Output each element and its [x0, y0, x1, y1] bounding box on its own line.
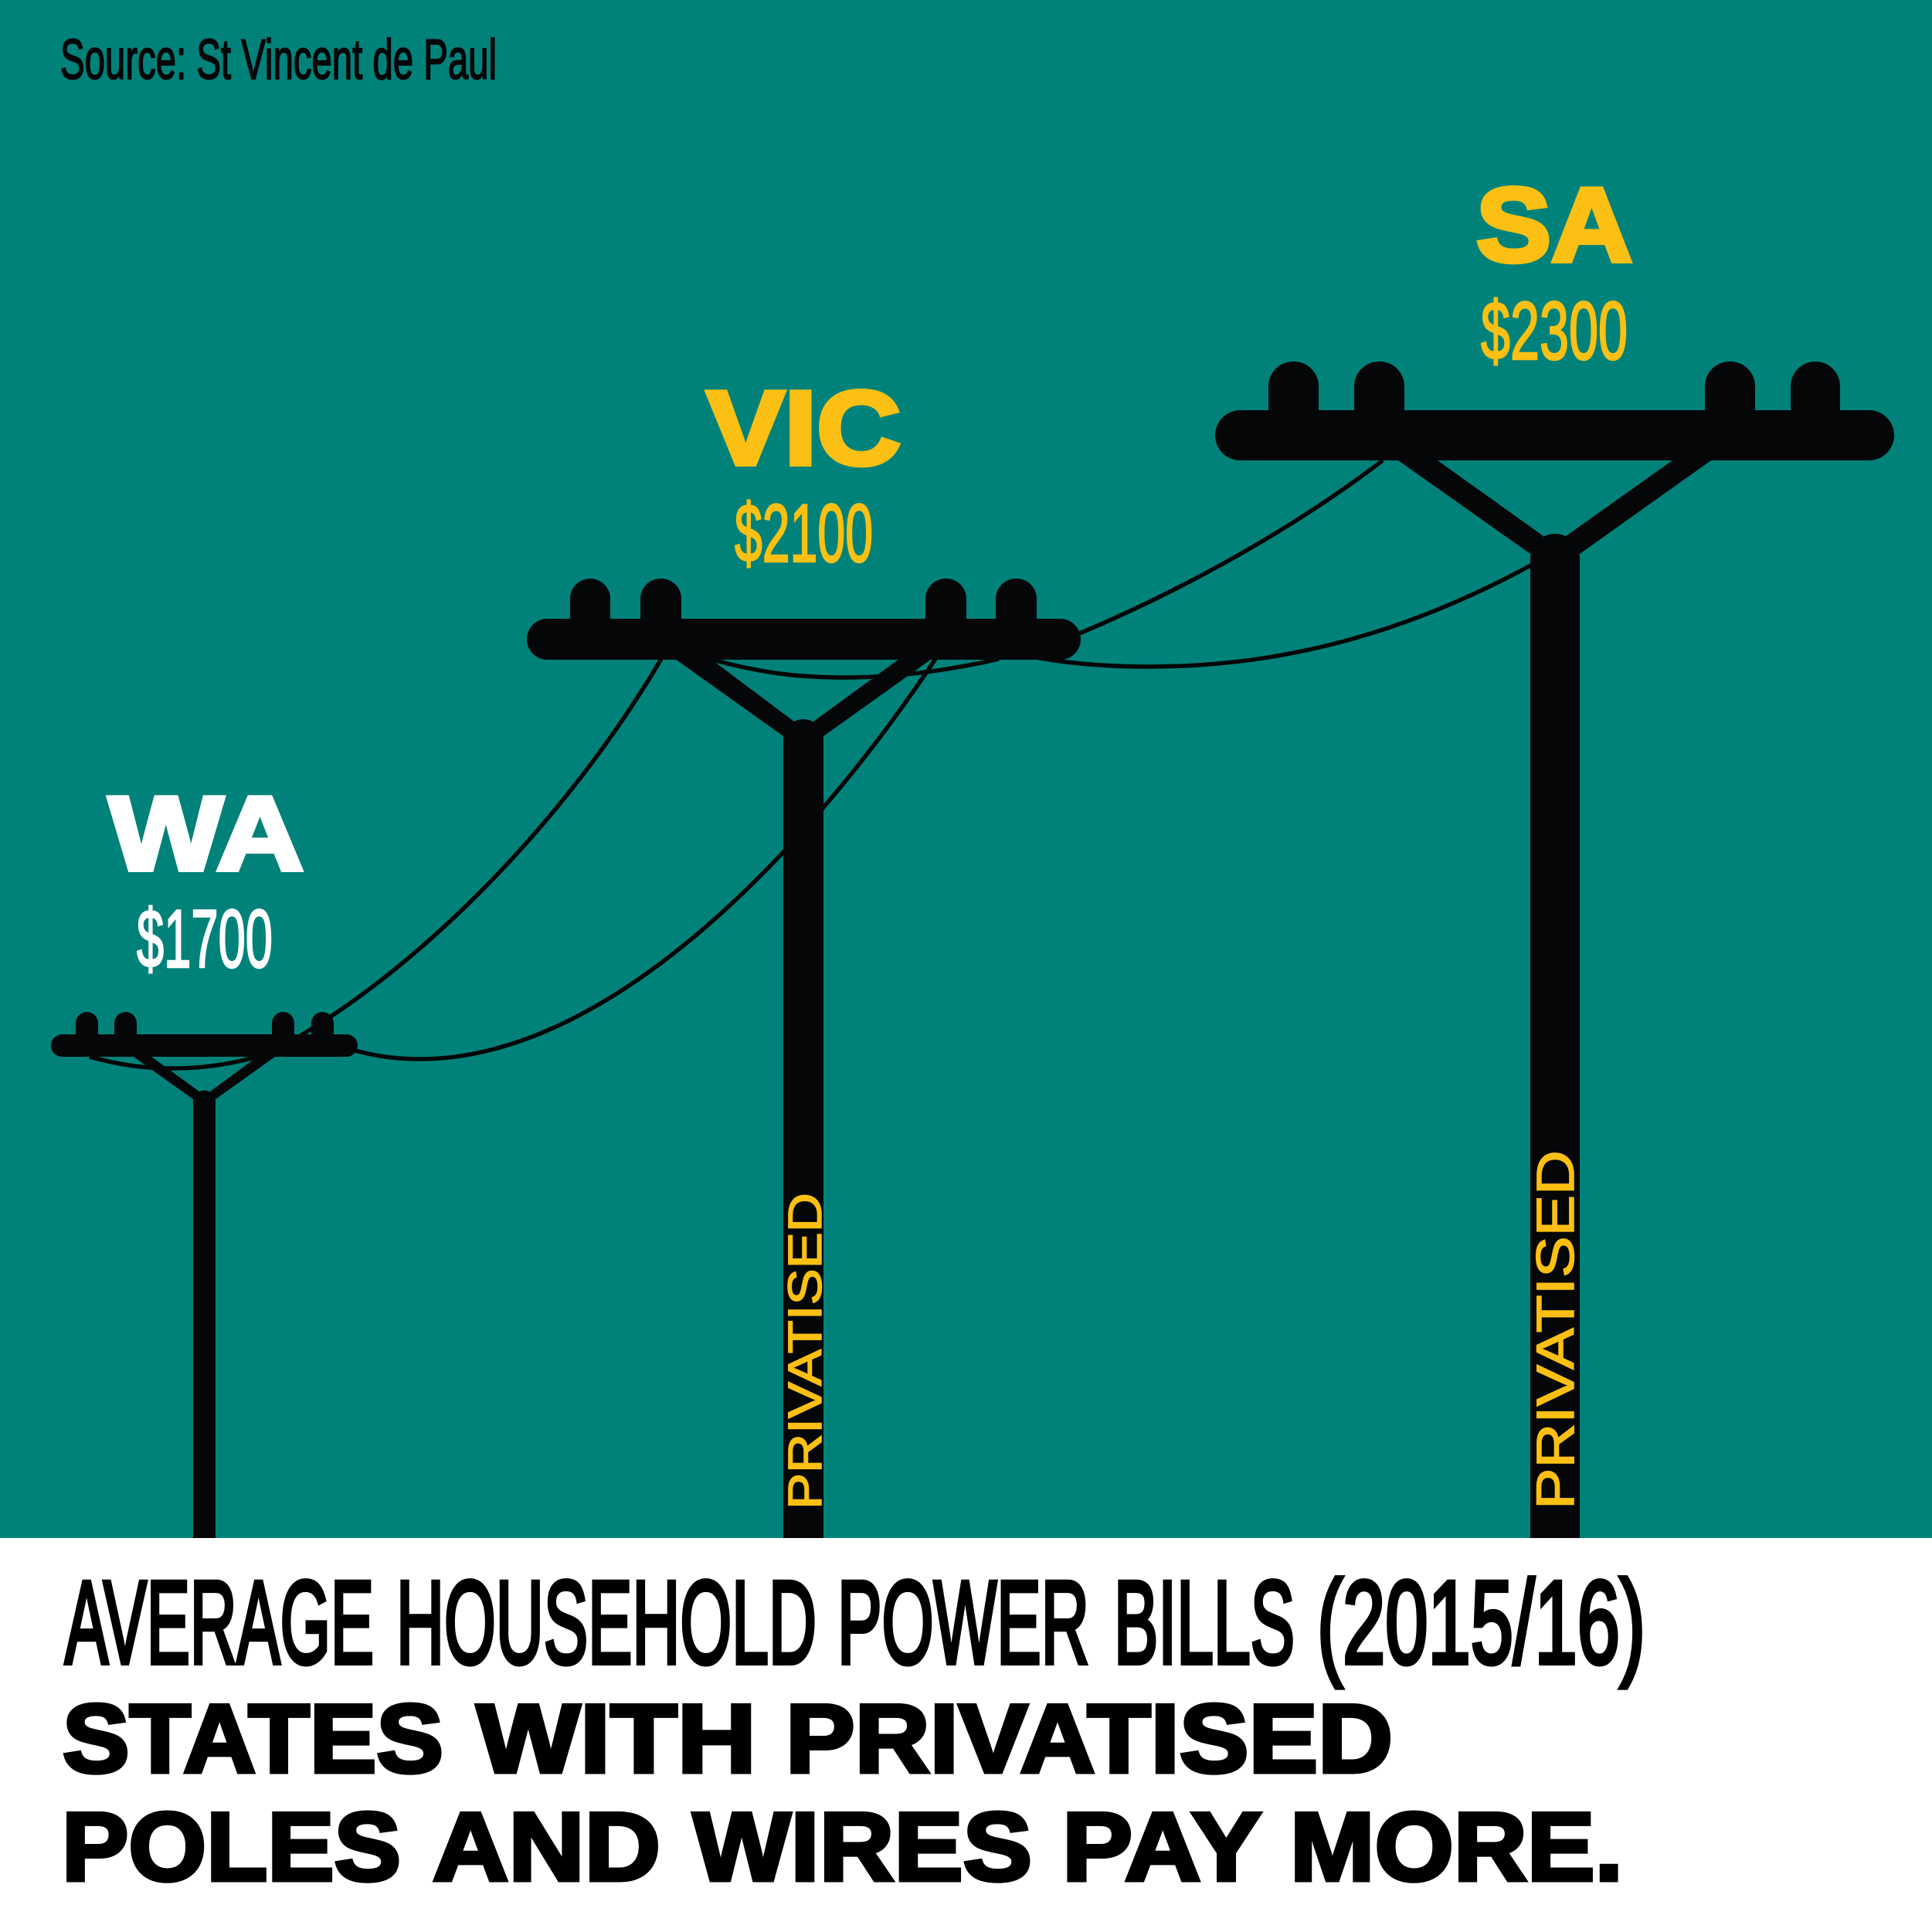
pole: WA: [51, 1012, 358, 1538]
caption heading: BILLS: [1114, 1557, 1295, 1689]
subheading line 1: PRIVATISED: [786, 1684, 1393, 1793]
subheading line 2: PAY: [1062, 1792, 1261, 1901]
SA pole shaft: [1530, 534, 1580, 1538]
subheading line 1: WITH: [477, 1684, 756, 1793]
wire: VIC sag: [707, 658, 999, 677]
source note: Source: St Vincent de Paul: [60, 29, 497, 91]
wire: VIC to SA lower: [1036, 564, 1533, 667]
subheading line 2: MORE.: [1290, 1792, 1623, 1901]
value: SA $2300: $2300: [1481, 284, 1628, 377]
VIC braces: [675, 659, 932, 736]
wire: WA to VIC lower: [355, 659, 935, 1059]
SA crossarm: [1215, 410, 1894, 460]
panel: teal background: [0, 0, 1932, 1538]
pole: SA: [1215, 362, 1894, 1538]
VIC pole shaft: [783, 719, 823, 1538]
SA insulators: [1268, 362, 1840, 460]
caption heading: [65, 1557, 1645, 1689]
WA pole shaft: [193, 1091, 216, 1538]
WA insulators: [76, 1012, 334, 1057]
VIC insulators: [570, 579, 1037, 660]
wire: WA to VIC upper: [297, 659, 661, 1037]
pole: VIC: [527, 579, 1081, 1538]
VIC crossarm: [527, 619, 1081, 660]
SA braces: [1398, 460, 1711, 554]
caption heading: (2015/16): [1317, 1557, 1645, 1689]
caption heading: POWER: [837, 1557, 1089, 1689]
power lines: [90, 460, 1533, 1068]
value: VIC $2100: $2100: [735, 487, 873, 579]
pole label: SA privatised: PRIVATISED: [1526, 1150, 1585, 1509]
WA braces: [134, 1057, 275, 1099]
label: VIC: VIC: [707, 369, 901, 487]
panel: white caption background: [0, 1538, 1932, 1932]
label: WA: WA: [109, 775, 304, 892]
subheading line 1: STATES: [63, 1684, 443, 1793]
wire: WA sag: [90, 1057, 257, 1068]
wire: VIC to SA upper: [1078, 460, 1383, 634]
subheading line 1: [63, 1684, 1393, 1793]
caption heading: HOUSEHOLD: [396, 1557, 817, 1689]
subheading line 2: WIRES: [693, 1792, 1032, 1901]
label: SA: SA: [1476, 166, 1632, 284]
subheading line 2: AND: [433, 1792, 660, 1901]
subheading line 2: POLES: [62, 1792, 401, 1901]
WA crossarm: [51, 1034, 358, 1057]
caption subheading: [62, 1684, 1623, 1901]
caption heading: AVERAGE: [65, 1557, 374, 1689]
subheading line 2: [62, 1792, 1623, 1901]
value: WA $1700: $1700: [137, 892, 273, 985]
pole label: VIC privatised: PRIVATISED: [779, 1193, 831, 1509]
